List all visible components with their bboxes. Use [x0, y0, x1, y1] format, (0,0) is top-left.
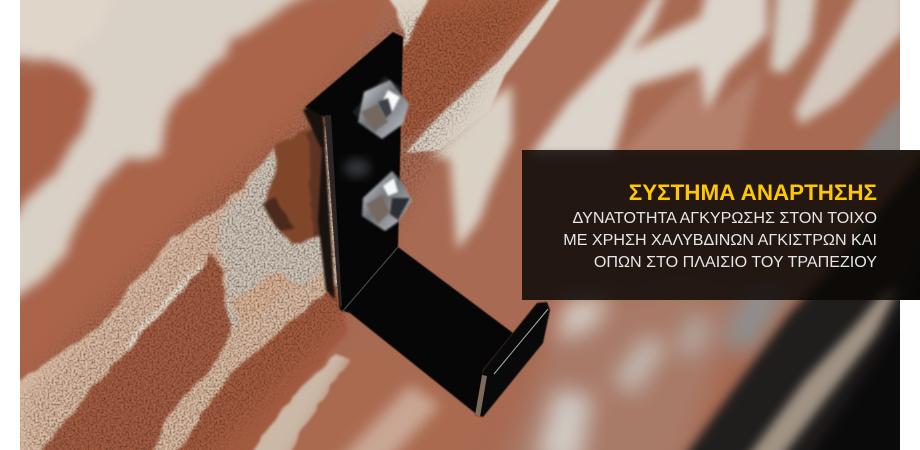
hook: bend highlight — [342, 247, 398, 312]
dark background in the lower right corner — [675, 150, 920, 450]
out-of-focus lower right wall — [500, 280, 795, 450]
hook: end tab — [475, 302, 550, 417]
hook shadow on the wall — [303, 100, 335, 300]
out-of-focus mortar spike right of the hook — [430, 85, 512, 250]
in-focus brick right of the hook — [388, 0, 552, 140]
fine brick and mortar grain in the focus zone — [20, 0, 540, 450]
caption title: ΣΥΣΤΗΜΑ ΑΝΑΡΤΗΣΗΣ — [629, 180, 877, 205]
beige diagonal strip in the background — [738, 290, 898, 450]
in-focus mortar band and lower bricks — [10, 125, 350, 450]
hook: plate edge highlight — [325, 115, 342, 308]
caption description: ΟΠΩΝ ΣΤΟ ΠΛΑΙΣΙΟ ΤΟΥ ΤΡΑΠΕΖΙΟΥ — [594, 253, 877, 271]
out-of-focus upper left mortar and bricks — [5, 0, 395, 392]
hook: tab highlight — [494, 309, 548, 374]
hook: plate glare — [344, 159, 370, 177]
soft mortar band right of the hook — [405, 0, 566, 153]
hook: tab edge — [475, 375, 487, 417]
blurred lower bricks below the hook — [285, 345, 480, 450]
caption description: ΜΕ ΧΡΗΣΗ ΧΑΛΥΒΔΙΝΩΝ ΑΓΚΙΣΤΡΩΝ ΚΑΙ — [563, 231, 877, 249]
lower bolt — [362, 171, 412, 231]
caption description — [563, 209, 877, 271]
caption description: ΔΥΝΑΤΟΤΗΤΑ ΑΓΚΥΡΩΣΗΣ ΣΤΟΝ ΤΟΙΧΟ — [573, 209, 877, 227]
caption panel — [522, 150, 920, 300]
upper bolt — [352, 76, 409, 139]
out-of-focus mortar upper right — [530, 0, 905, 155]
hook: wall plate and arm — [305, 32, 513, 417]
crumbled brick around the anchor hole — [262, 125, 325, 247]
steel hook — [305, 32, 550, 417]
